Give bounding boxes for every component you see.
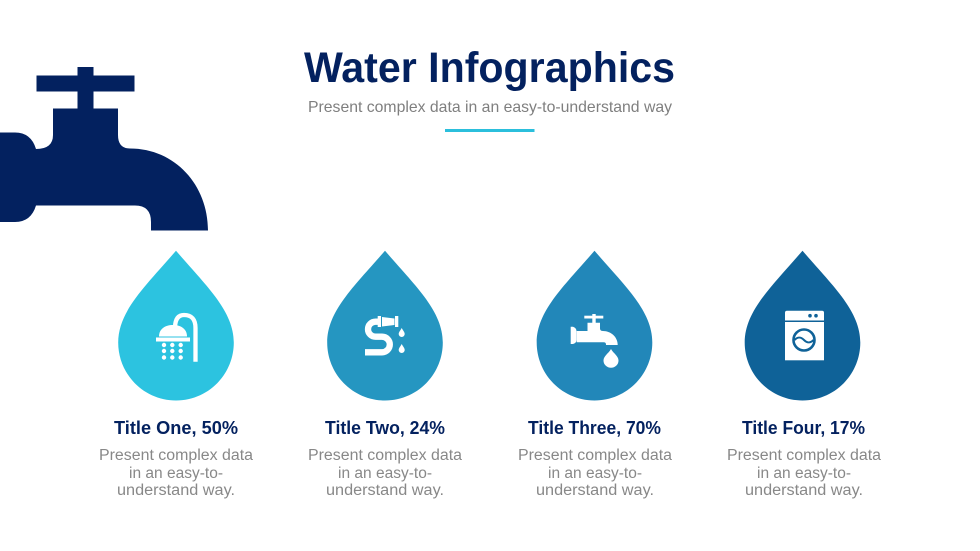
accent rule (445, 129, 534, 132)
description one: Present complex data (99, 447, 253, 464)
drop two (327, 251, 443, 400)
icon: shower (156, 315, 196, 362)
icon: large faucet (0, 67, 208, 230)
icon: leaking pipe (365, 316, 405, 353)
description two: understand way. (326, 482, 444, 499)
description four (727, 447, 881, 499)
icon: washing machine (785, 311, 824, 360)
description four: understand way. (745, 482, 863, 499)
subtitle: Present complex data in an easy-to-understand way (308, 99, 672, 116)
description three: Present complex data (518, 447, 672, 464)
description four: Present complex data (727, 447, 881, 464)
description one (99, 447, 253, 499)
title: Water Infographics (304, 44, 675, 92)
heading two: Title Two, 24% (325, 418, 445, 438)
description two (308, 447, 462, 499)
description two: Present complex data (308, 447, 462, 464)
card: title one (99, 251, 253, 499)
card: title two (308, 251, 462, 499)
icon: tap with drop (571, 314, 618, 368)
heading three: Title Three, 70% (528, 418, 661, 438)
heading four: Title Four, 17% (742, 418, 865, 438)
drop one (118, 251, 234, 400)
description two: in an easy-to- (338, 465, 432, 482)
drop four (745, 251, 860, 400)
description one: in an easy-to- (129, 465, 223, 482)
heading one: Title One, 50% (114, 418, 238, 438)
description three (518, 447, 672, 499)
description four: in an easy-to- (757, 465, 851, 482)
description three: understand way. (536, 482, 654, 499)
drop three (537, 251, 652, 400)
card: title three (518, 251, 672, 499)
description one: understand way. (117, 482, 235, 499)
card: title four (727, 251, 881, 499)
description three: in an easy-to- (548, 465, 642, 482)
